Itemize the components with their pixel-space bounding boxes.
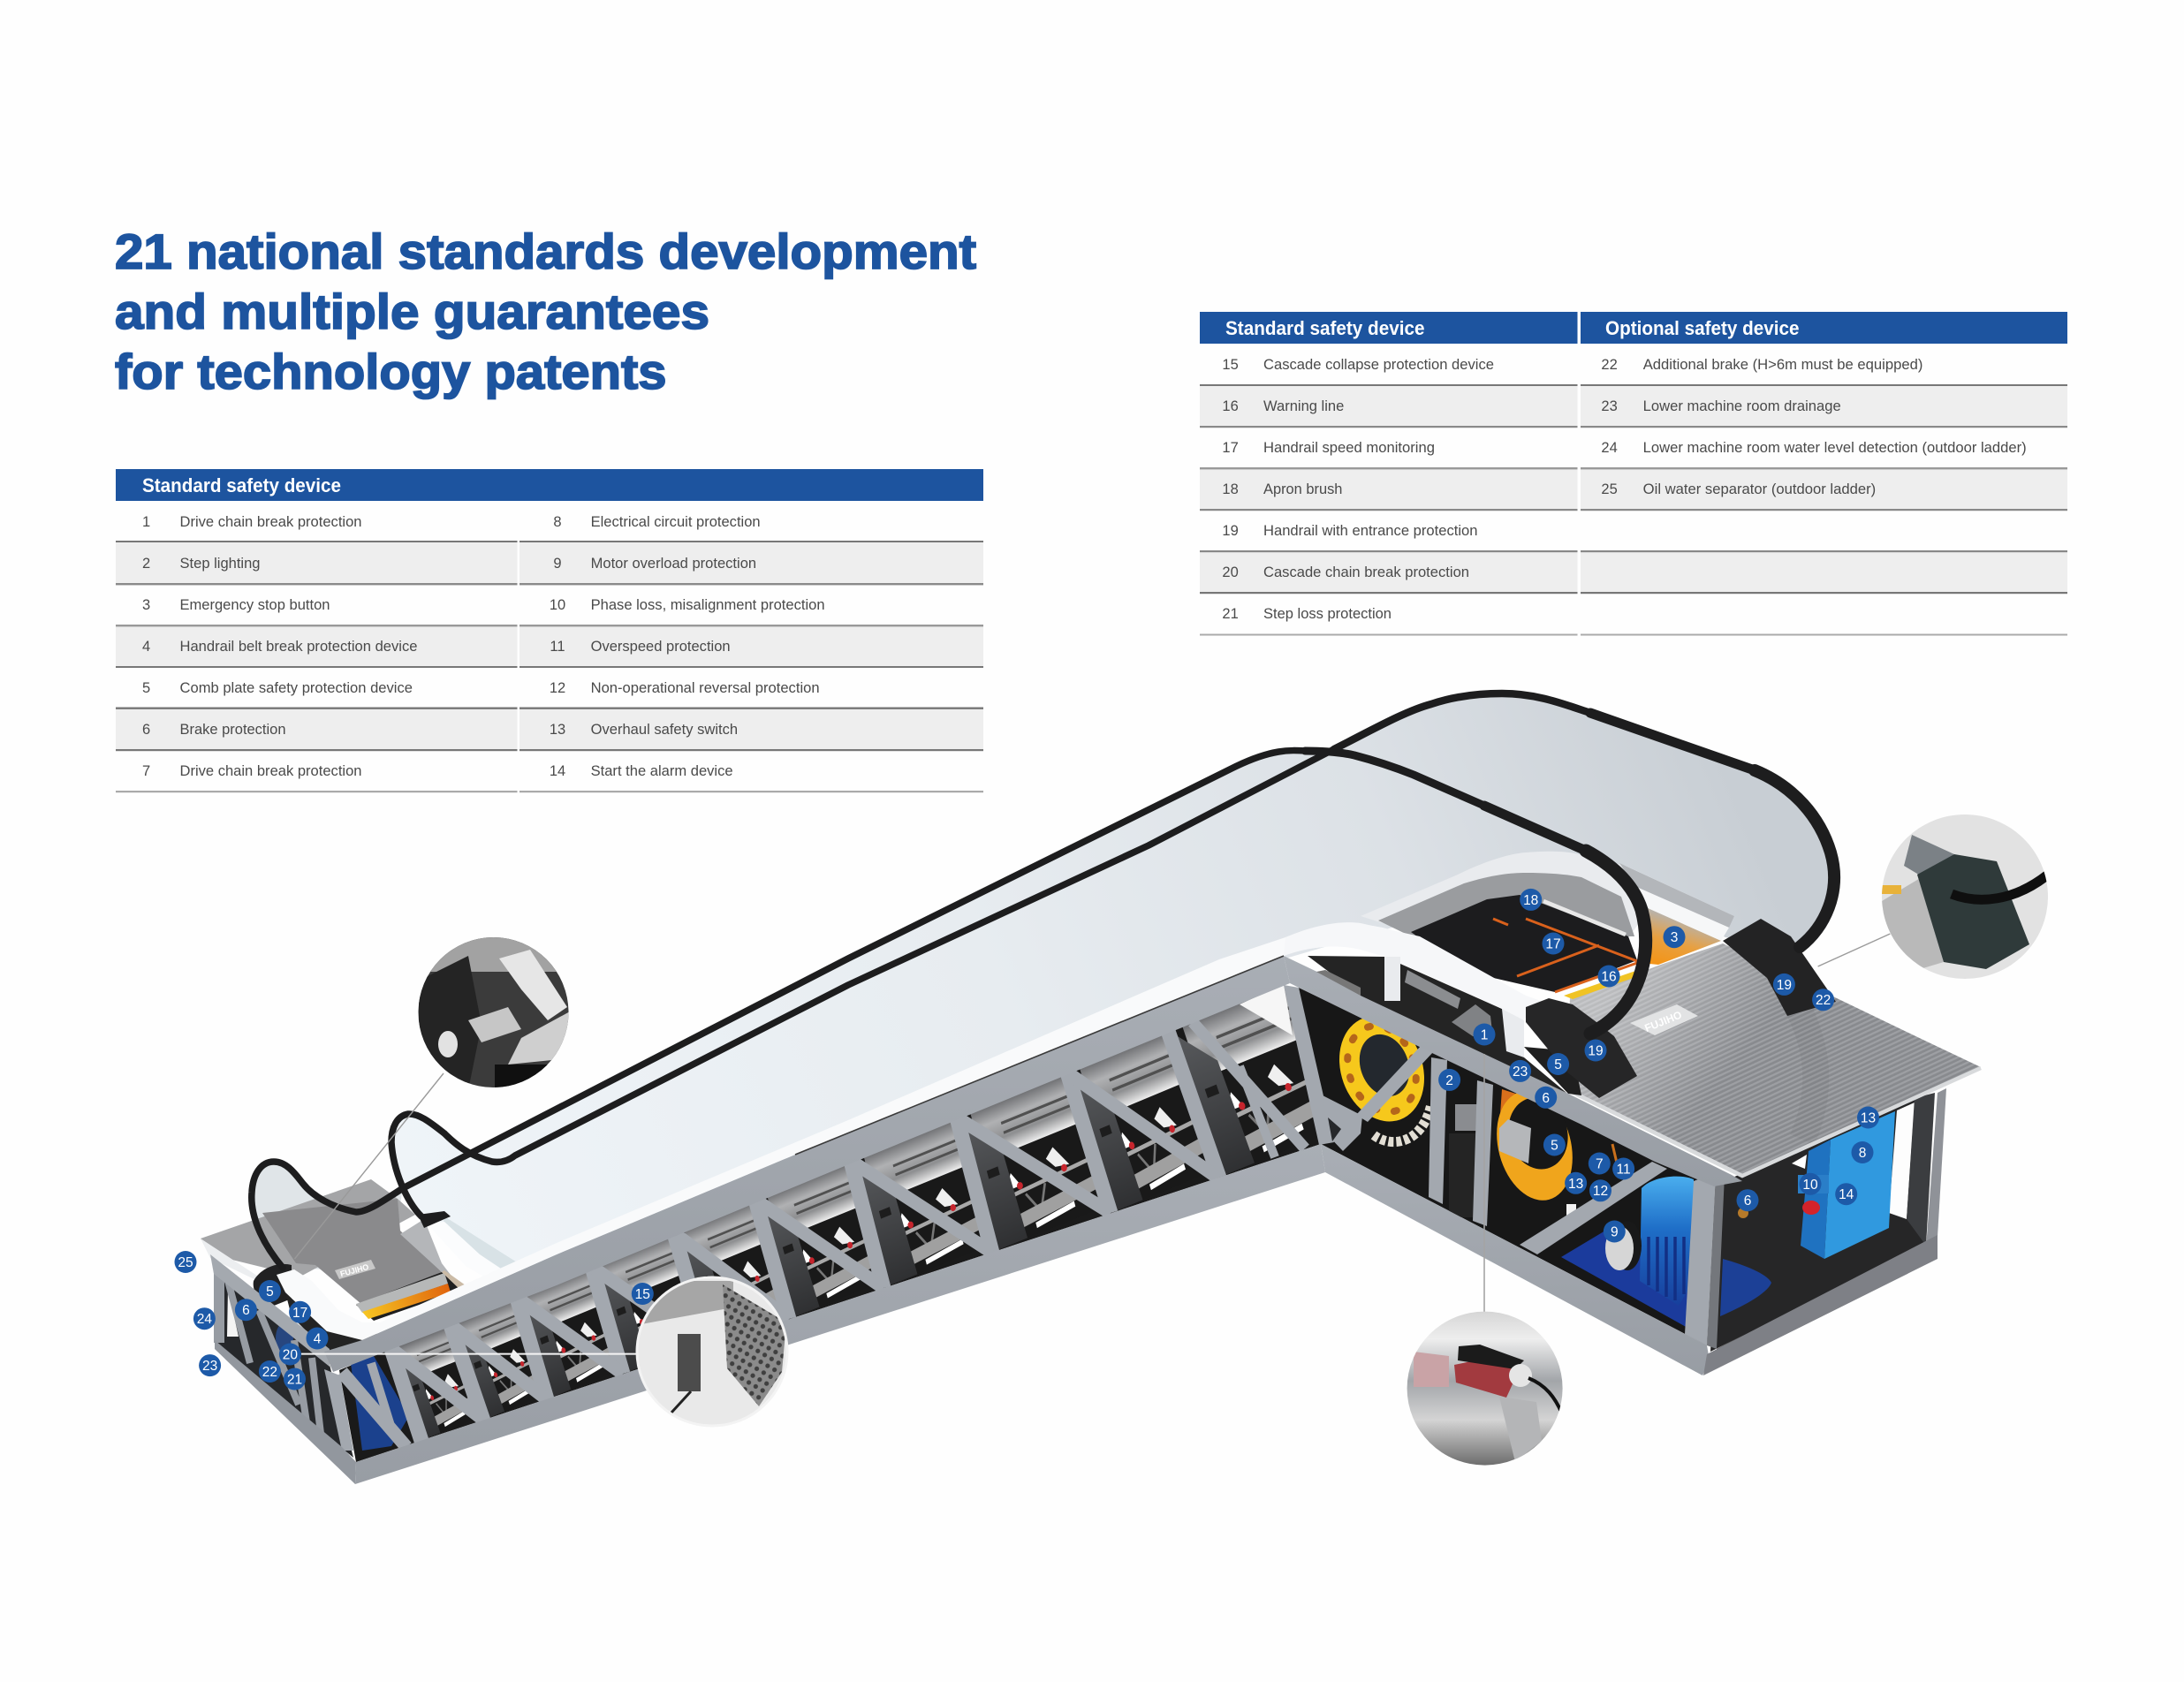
lower landing FUJIHO label bbox=[335, 1260, 375, 1279]
lower newel bbox=[254, 1264, 292, 1307]
table: standard safety devices 1-14: Drive chain break protection bbox=[180, 763, 362, 779]
title: 21 national standards development bbox=[115, 224, 976, 279]
number badges: lower landing: 21 bbox=[287, 1373, 302, 1387]
table: standard safety devices 1-14: 13 bbox=[550, 722, 565, 738]
upper landing lower chord bbox=[1321, 1144, 1710, 1375]
blue control cabinet bbox=[1798, 1111, 1895, 1259]
table: standard and optional safety devices 15-25: Lower machine room drainage bbox=[1643, 398, 1841, 414]
table: standard safety devices 1-14: Overspeed protection bbox=[591, 639, 731, 655]
upper landing plate bbox=[1566, 943, 1981, 1176]
table: standard and optional safety devices 15-25: 18 bbox=[1222, 481, 1239, 497]
number badges: lower landing: 4 bbox=[314, 1332, 322, 1346]
lower end top chord bbox=[210, 1254, 330, 1367]
white wall at upper truss end bbox=[1240, 984, 1293, 1035]
number badges: upper landing: 3 bbox=[1671, 930, 1678, 945]
far arch white strip bbox=[1634, 886, 1729, 941]
truss posts and diagonals bbox=[342, 1022, 1305, 1447]
table: standard and optional safety devices 15-25: 22 bbox=[1601, 357, 1618, 373]
callout: guide line 3 bbox=[1483, 1054, 1485, 1314]
table header bbox=[116, 469, 983, 501]
deck shadow line bbox=[795, 956, 1284, 1155]
table header: Standard safety device bbox=[142, 474, 341, 496]
main lower chord bbox=[355, 1144, 1325, 1484]
table: standard safety devices 1-14: 8 bbox=[553, 514, 562, 530]
orange glow area bbox=[1641, 908, 1721, 965]
far arch grey inner bbox=[1378, 873, 1634, 936]
number badges: upper landing: 11 bbox=[1617, 1163, 1631, 1177]
table: standard and optional safety devices 15-25: 20 bbox=[1222, 564, 1239, 580]
number badges: upper landing: 6 bbox=[1744, 1193, 1751, 1208]
number badges: upper landing: 7 bbox=[1596, 1157, 1604, 1171]
title bbox=[115, 224, 976, 399]
lower landing front lip bbox=[201, 1239, 285, 1294]
moulding struts bbox=[1384, 957, 1524, 1057]
table: standard and optional safety devices 15-25: 25 bbox=[1601, 481, 1618, 497]
table header bbox=[1200, 312, 2067, 344]
table: standard safety devices 1-14: Drive chain break protection bbox=[180, 514, 362, 530]
number badges: upper landing: 9 bbox=[1611, 1224, 1619, 1240]
handrail: far hump bbox=[1334, 693, 1590, 749]
callout: guide line 4 bbox=[1818, 934, 1890, 966]
table: standard and optional safety devices 15-25: Apron brush bbox=[1263, 481, 1342, 497]
number badges: upper landing: 12 bbox=[1593, 1184, 1608, 1199]
frame gusset bbox=[1328, 1118, 1341, 1141]
table: standard and optional safety devices 15-25: 23 bbox=[1601, 398, 1618, 414]
number badges: upper landing: 6 bbox=[1542, 1091, 1550, 1106]
table: standard safety devices 1-14: Electrical circuit protection bbox=[591, 514, 761, 530]
table: standard safety devices 1-14: 11 bbox=[550, 639, 565, 655]
table: standard safety devices 1-14: Emergency stop button bbox=[180, 597, 330, 613]
number badges: upper landing: 8 bbox=[1859, 1146, 1866, 1161]
number badges: upper landing: 14 bbox=[1839, 1187, 1854, 1202]
table: standard and optional safety devices 15-25: Oil water separator (outdoor ladder) bbox=[1643, 481, 1876, 497]
table: standard safety devices 1-14: Comb plate safety protection device bbox=[180, 680, 413, 696]
near moulding over the landing bbox=[1284, 922, 1546, 1020]
near top newel bbox=[1526, 998, 1637, 1098]
table: standard safety devices 1-14 bbox=[116, 469, 983, 792]
far arch outer band bbox=[1361, 852, 1734, 941]
number badges: upper landing: 13 bbox=[1861, 1111, 1876, 1125]
table: standard safety devices 1-14: Step lighting bbox=[180, 556, 260, 572]
table: standard safety devices 1-14: 2 bbox=[142, 556, 150, 572]
machine room bbox=[1710, 1088, 1946, 1358]
upper landing interior bbox=[1299, 988, 1714, 1345]
number badges: upper landing: 18 bbox=[1523, 893, 1538, 908]
table: standard and optional safety devices 15-25: Cascade chain break protection bbox=[1263, 564, 1469, 580]
moulding gap with rollers bbox=[1308, 956, 1566, 1093]
callout circle: handrail switch bbox=[415, 935, 574, 1091]
truss dark interior bbox=[339, 983, 1321, 1462]
lower end frame members bbox=[219, 1272, 321, 1434]
table: standard and optional safety devices 15-25: Warning line bbox=[1263, 398, 1344, 414]
table: standard safety devices 1-14: 10 bbox=[550, 597, 565, 613]
table: standard and optional safety devices 15-25: 15 bbox=[1222, 357, 1239, 373]
table: standard and optional safety devices 15-25: Lower machine room water level detection (outdoor ladder) bbox=[1643, 440, 2027, 456]
table: standard safety devices 1-14: 5 bbox=[142, 680, 150, 696]
table: standard safety devices 1-14: 1 bbox=[142, 514, 150, 530]
handrail: far newel end bbox=[1755, 770, 1834, 947]
number badges: lower landing: 5 bbox=[266, 1284, 274, 1299]
handrail: left loop to near top newel bbox=[252, 751, 1305, 1268]
table: standard safety devices 1-14: Motor overload protection bbox=[591, 556, 756, 572]
table: standard and optional safety devices 15-25: Handrail with entrance protection bbox=[1263, 523, 1477, 539]
table: standard safety devices 1-14: Brake protection bbox=[180, 722, 286, 738]
blue motor and base bbox=[1561, 1177, 1694, 1328]
machine room bottom frame bbox=[1703, 1235, 1938, 1375]
number badges: upper landing: 2 bbox=[1445, 1073, 1453, 1088]
callout: guide line 2 bbox=[301, 1353, 641, 1355]
number badges: upper landing: 17 bbox=[1545, 936, 1561, 952]
table: standard safety devices 1-14: Phase loss, misalignment protection bbox=[591, 597, 825, 613]
number badges: upper landing: 10 bbox=[1802, 1178, 1818, 1193]
table: standard safety devices 1-14: 14 bbox=[550, 763, 565, 779]
callout circle: step sensor bbox=[636, 1277, 791, 1427]
number badges: upper landing: 5 bbox=[1554, 1057, 1562, 1072]
title: and multiple guarantees bbox=[115, 284, 709, 339]
far top newel bbox=[1723, 919, 1836, 1016]
handrail: front loop to far top newel bbox=[391, 749, 1334, 1216]
table: standard safety devices 1-14: Non-operational reversal protection bbox=[591, 680, 820, 696]
table: standard and optional safety devices 15-25: 19 bbox=[1222, 523, 1239, 539]
table: standard and optional safety devices 15-25: Cascade collapse protection device bbox=[1263, 357, 1494, 373]
number badges: upper landing bbox=[1438, 889, 1879, 1242]
left loop glass bbox=[252, 1162, 403, 1272]
main upper chord bbox=[324, 956, 1290, 1372]
callout circle: handrail entry bbox=[1882, 814, 2050, 981]
truss bays interior bbox=[391, 983, 1333, 1441]
lower end dark bay bbox=[214, 1272, 353, 1458]
table: standard safety devices 1-14: 9 bbox=[553, 556, 562, 572]
table: standard safety devices 1-14: Handrail belt break protection device bbox=[180, 639, 417, 655]
white deck moulding bbox=[277, 924, 1535, 1340]
number badges: lower landing: 24 bbox=[197, 1312, 212, 1327]
number badges: upper landing: 1 bbox=[1481, 1028, 1488, 1042]
handrail: near descent bbox=[1484, 806, 1586, 851]
callout circle: red proximity sensor bbox=[1405, 1311, 1564, 1466]
upper landing upper chord bbox=[1284, 956, 1742, 1186]
number badges: upper landing: 22 bbox=[1816, 993, 1831, 1008]
upper dark skirt area right of strut bbox=[1524, 1047, 1581, 1095]
table: standard and optional safety devices 15-25: 17 bbox=[1222, 440, 1239, 456]
table: standard and optional safety devices 15-25: 21 bbox=[1222, 606, 1239, 622]
number badges: lower landing: 23 bbox=[202, 1359, 217, 1374]
table: standard safety devices 1-14: Start the alarm device bbox=[591, 763, 733, 779]
table header: Standard safety device bbox=[1225, 317, 1424, 339]
number badges: lower landing: 25 bbox=[178, 1255, 193, 1270]
table: standard and optional safety devices 15-25: Step loss protection bbox=[1263, 606, 1392, 622]
table: standard and optional safety devices 15-25: 16 bbox=[1222, 398, 1239, 414]
number badges: upper landing: 19 bbox=[1777, 978, 1792, 993]
step pit bbox=[1411, 895, 1643, 999]
table header: Optional safety device bbox=[1605, 317, 1799, 339]
number badges: lower landing: 17 bbox=[292, 1306, 307, 1321]
far moulding at lower landing bbox=[400, 1211, 521, 1292]
table: standard safety devices 1-14: Overhaul safety switch bbox=[591, 722, 738, 738]
upper landing FUJIHO label: FUJIHO bbox=[1642, 1009, 1684, 1034]
table: standard safety devices 1-14: 7 bbox=[142, 763, 150, 779]
handrail: far descent bbox=[1590, 713, 1755, 770]
table: standard and optional safety devices 15-25 bbox=[1200, 312, 2067, 636]
table: standard and optional safety devices 15-25: Handrail speed monitoring bbox=[1263, 440, 1435, 456]
corner post bbox=[324, 1369, 353, 1451]
upper landing frame members bbox=[1284, 985, 1667, 1254]
lower landing inner plate bbox=[262, 1199, 442, 1305]
handrail: near newel end bbox=[1586, 851, 1646, 1034]
number badges: lower landing bbox=[175, 1251, 654, 1390]
number badges: lower landing: 6 bbox=[242, 1303, 250, 1318]
callout: guide line 1 bbox=[295, 1073, 444, 1259]
escalator illustration bbox=[201, 693, 1981, 1484]
orange brake wheel bbox=[1485, 1083, 1619, 1216]
inner machinery panels bbox=[1449, 1104, 1477, 1217]
number badges: upper landing: 19 bbox=[1588, 1044, 1604, 1058]
lower landing comb strip and yellow band bbox=[356, 1272, 462, 1321]
handrails bbox=[252, 693, 1834, 1268]
table: standard and optional safety devices 15-25: Additional brake (H>6m must be equipped) bbox=[1643, 357, 1922, 373]
upper landing FUJIHO label bbox=[1630, 1004, 1698, 1035]
number badges: upper landing: 5 bbox=[1551, 1138, 1558, 1154]
lower landing outer plate bbox=[201, 1179, 415, 1277]
handrail: near hump bbox=[1305, 751, 1484, 806]
far arch silver strip bbox=[1619, 863, 1734, 928]
number badges: upper landing: 23 bbox=[1513, 1065, 1528, 1080]
number badges: upper landing: 13 bbox=[1568, 1177, 1583, 1192]
number badges: upper landing: 16 bbox=[1601, 970, 1617, 984]
table: standard safety devices 1-14: 6 bbox=[142, 722, 150, 738]
corner post bbox=[1685, 1172, 1725, 1349]
number badges: lower landing: 20 bbox=[283, 1348, 298, 1362]
main balustrade glass bbox=[391, 693, 1834, 1277]
table: standard safety devices 1-14: 12 bbox=[550, 680, 565, 696]
title: for technology patents bbox=[115, 344, 666, 399]
lower landing FUJIHO label: FUJIHO bbox=[339, 1262, 369, 1278]
blue motor at lower end bbox=[351, 1356, 409, 1451]
number badges: lower landing: 22 bbox=[262, 1365, 277, 1380]
moulding shadow block bbox=[285, 1292, 380, 1353]
lower end bottom chord bbox=[215, 1340, 356, 1484]
number badges: lower landing: 15 bbox=[635, 1287, 650, 1302]
table: standard and optional safety devices 15-25: 24 bbox=[1601, 440, 1618, 456]
table: standard safety devices 1-14: 4 bbox=[142, 639, 150, 655]
yellow drive wheel bbox=[1325, 1004, 1438, 1142]
table: standard safety devices 1-14: 3 bbox=[142, 597, 150, 613]
